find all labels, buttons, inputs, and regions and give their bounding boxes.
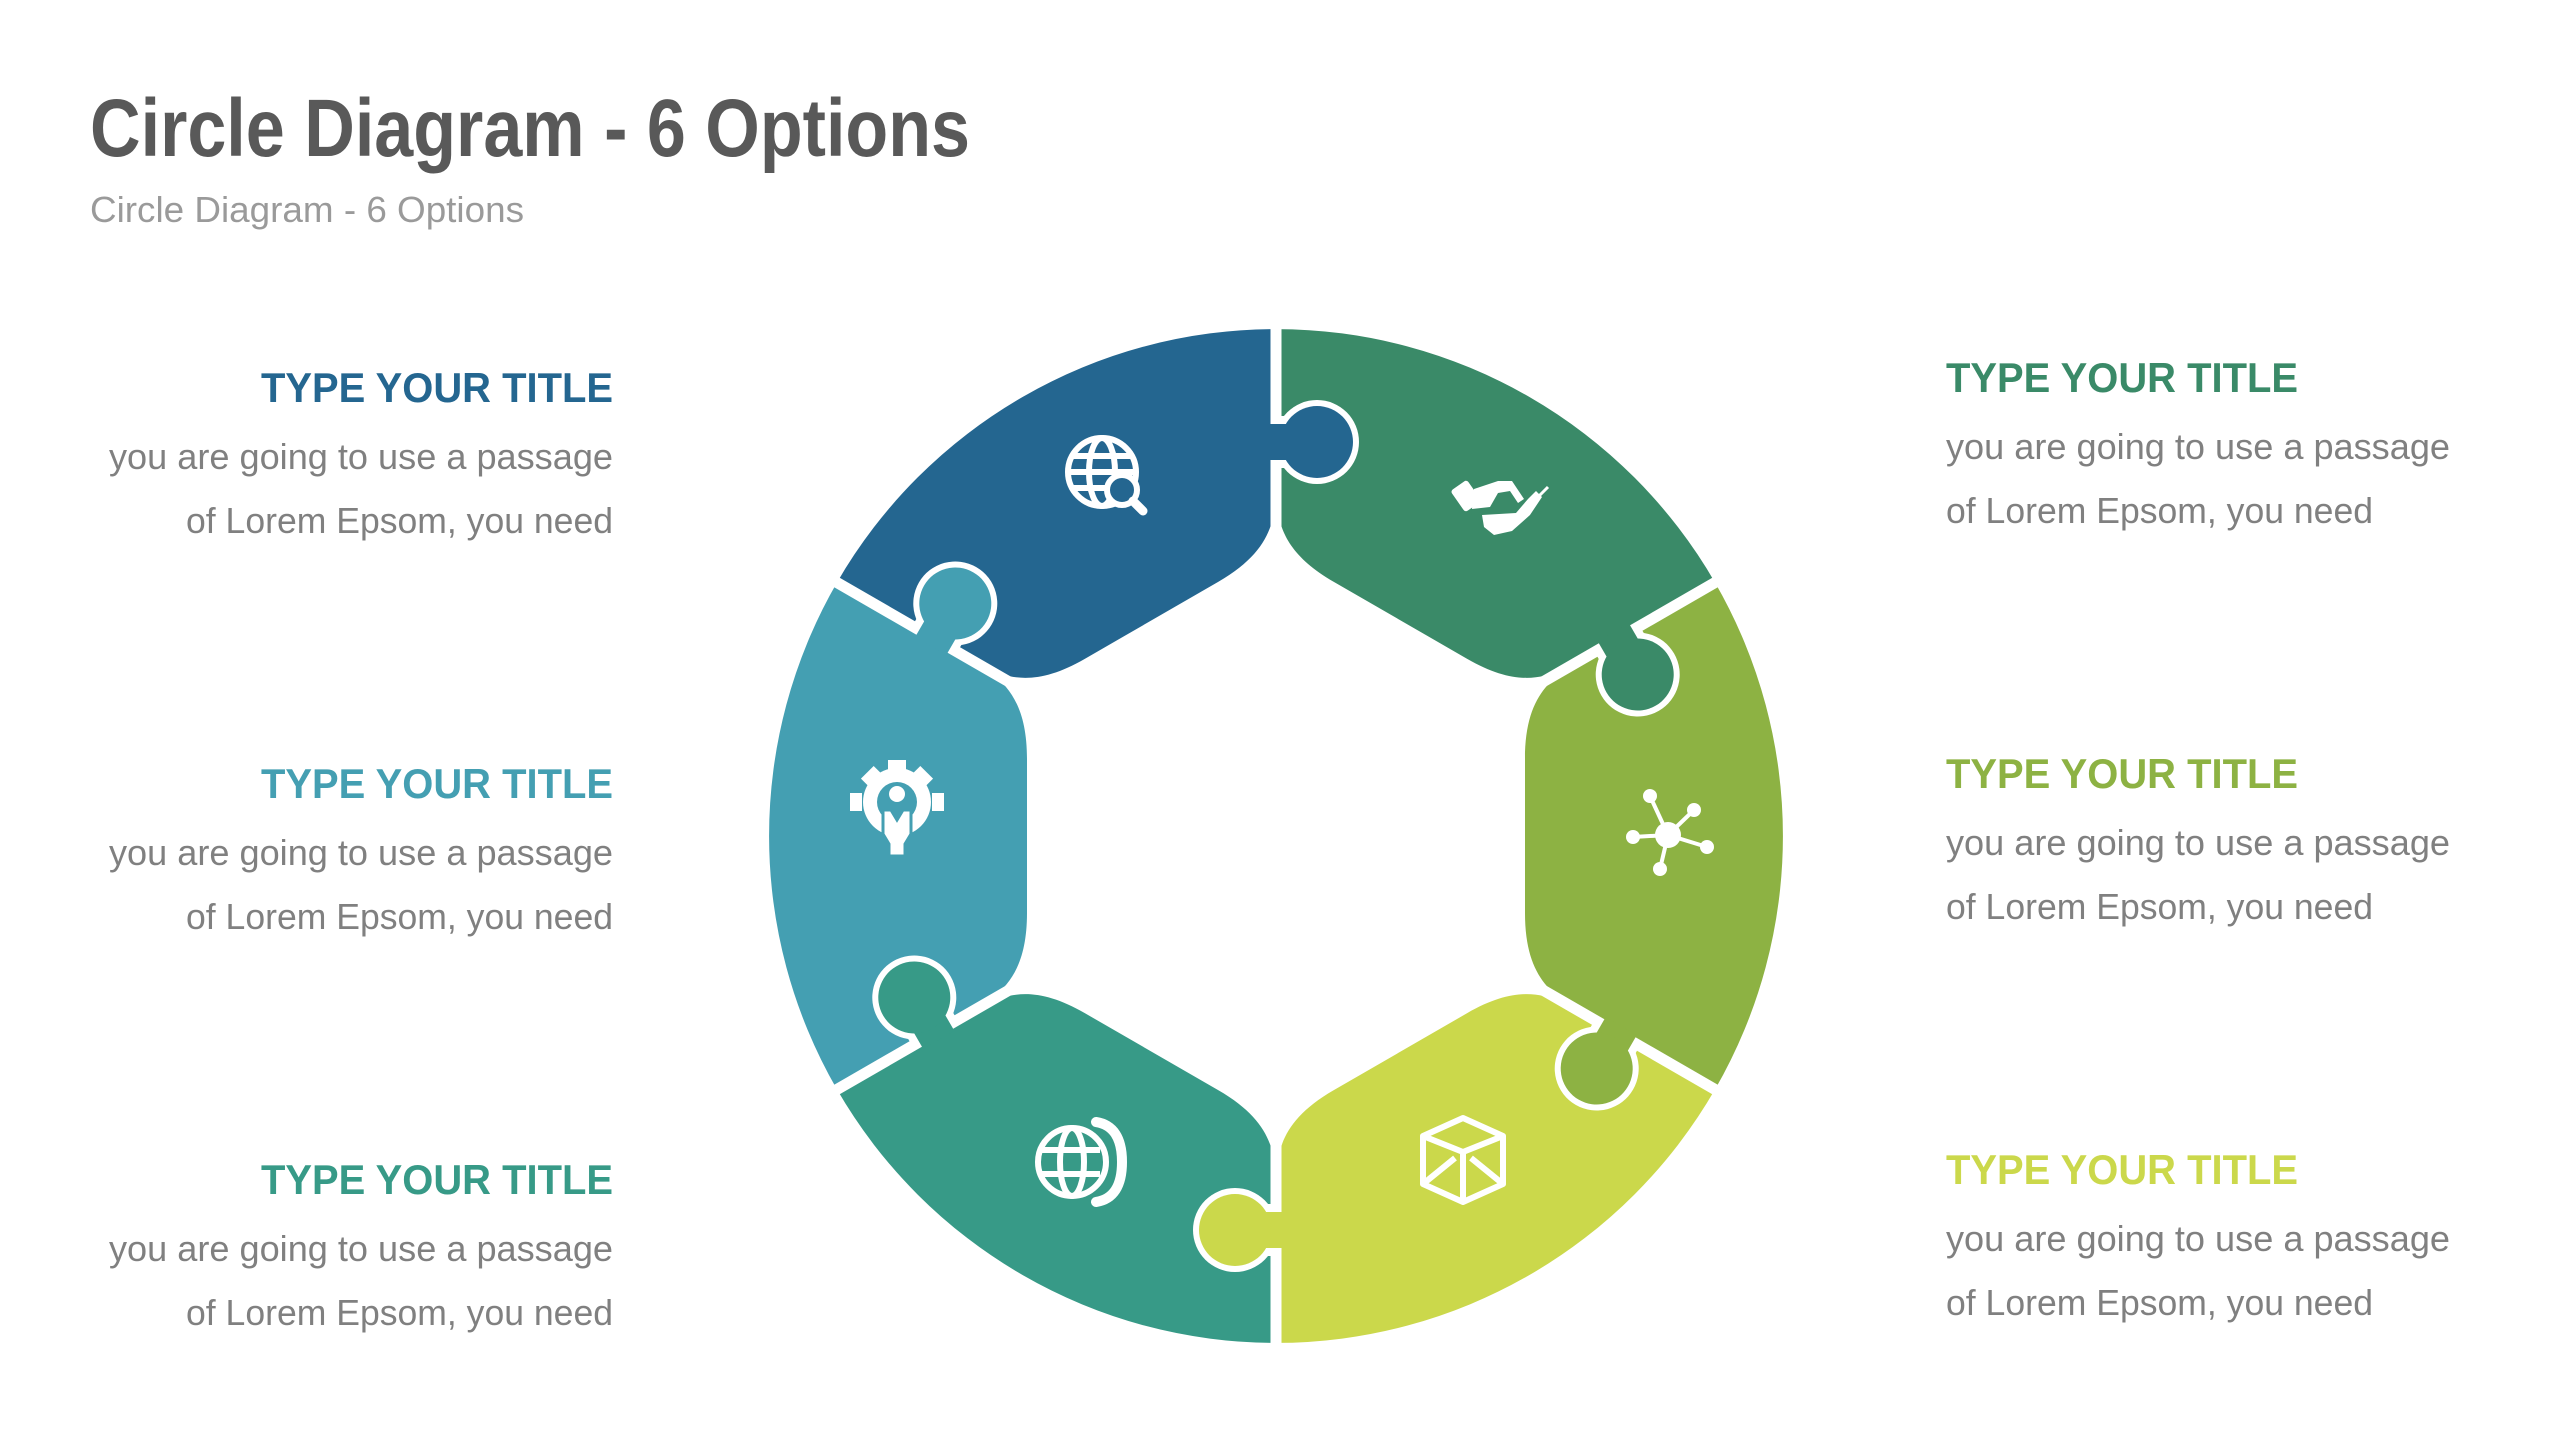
subtitle: Circle Diagram - 6 Options	[90, 189, 524, 230]
title: Circle Diagram - 6 Options	[90, 83, 970, 174]
piece: teal	[803, 925, 1371, 1402]
text block: right middle: TYPE YOUR TITLE	[1946, 750, 2298, 797]
knob: light teal into dark blue	[894, 546, 1013, 667]
text block: right middle	[1946, 750, 2450, 927]
text block: left middle	[109, 760, 613, 937]
text block: right top: you are going to use a passage	[1946, 426, 2450, 467]
text block: left bottom: of Lorem Epsom, you need	[186, 1292, 613, 1333]
icon: network	[1626, 789, 1714, 876]
piece: lime	[1181, 925, 1749, 1402]
circle diagram	[769, 270, 1783, 1402]
knob: olive into lime	[1539, 1005, 1658, 1126]
text block: left middle: of Lorem Epsom, you need	[186, 896, 613, 937]
text block: left bottom	[109, 1156, 613, 1333]
text block: left middle: TYPE YOUR TITLE	[261, 760, 613, 807]
text block: right top	[1946, 354, 2450, 531]
icon: cube	[1423, 1118, 1503, 1202]
text block: right bottom: you are going to use a passage	[1946, 1218, 2450, 1259]
text block: right bottom: of Lorem Epsom, you need	[1946, 1282, 2373, 1323]
text block: left bottom: you are going to use a passage	[109, 1228, 613, 1269]
text block: right middle: of Lorem Epsom, you need	[1946, 886, 2373, 927]
piece: olive	[1525, 582, 1783, 1090]
knob: teal into light teal	[857, 940, 975, 1061]
text block: left top	[109, 364, 613, 541]
icon: globe phone	[1038, 1122, 1122, 1202]
text block: left middle: you are going to use a passage	[109, 832, 613, 873]
knob: lime into teal	[1193, 1188, 1284, 1272]
text block: right top: of Lorem Epsom, you need	[1946, 490, 2373, 531]
icon: globe search	[1068, 438, 1143, 511]
icon: gear person	[850, 760, 944, 856]
text block: right bottom	[1946, 1146, 2450, 1323]
knob: green into olive	[1577, 611, 1695, 732]
piece: dark blue	[803, 270, 1371, 747]
piece: light teal	[769, 582, 1027, 1090]
text block: left top: TYPE YOUR TITLE	[261, 364, 613, 411]
text block: right middle: you are going to use a passage	[1946, 822, 2450, 863]
text block: right top: TYPE YOUR TITLE	[1946, 354, 2298, 401]
text block: left top: you are going to use a passage	[109, 436, 613, 477]
text block: left top: of Lorem Epsom, you need	[186, 500, 613, 541]
text block: left bottom: TYPE YOUR TITLE	[261, 1156, 613, 1203]
knob: dark blue into green	[1268, 400, 1359, 484]
icon: handshake	[1450, 480, 1548, 535]
piece: green	[1181, 270, 1749, 747]
text block: right bottom: TYPE YOUR TITLE	[1946, 1146, 2298, 1193]
